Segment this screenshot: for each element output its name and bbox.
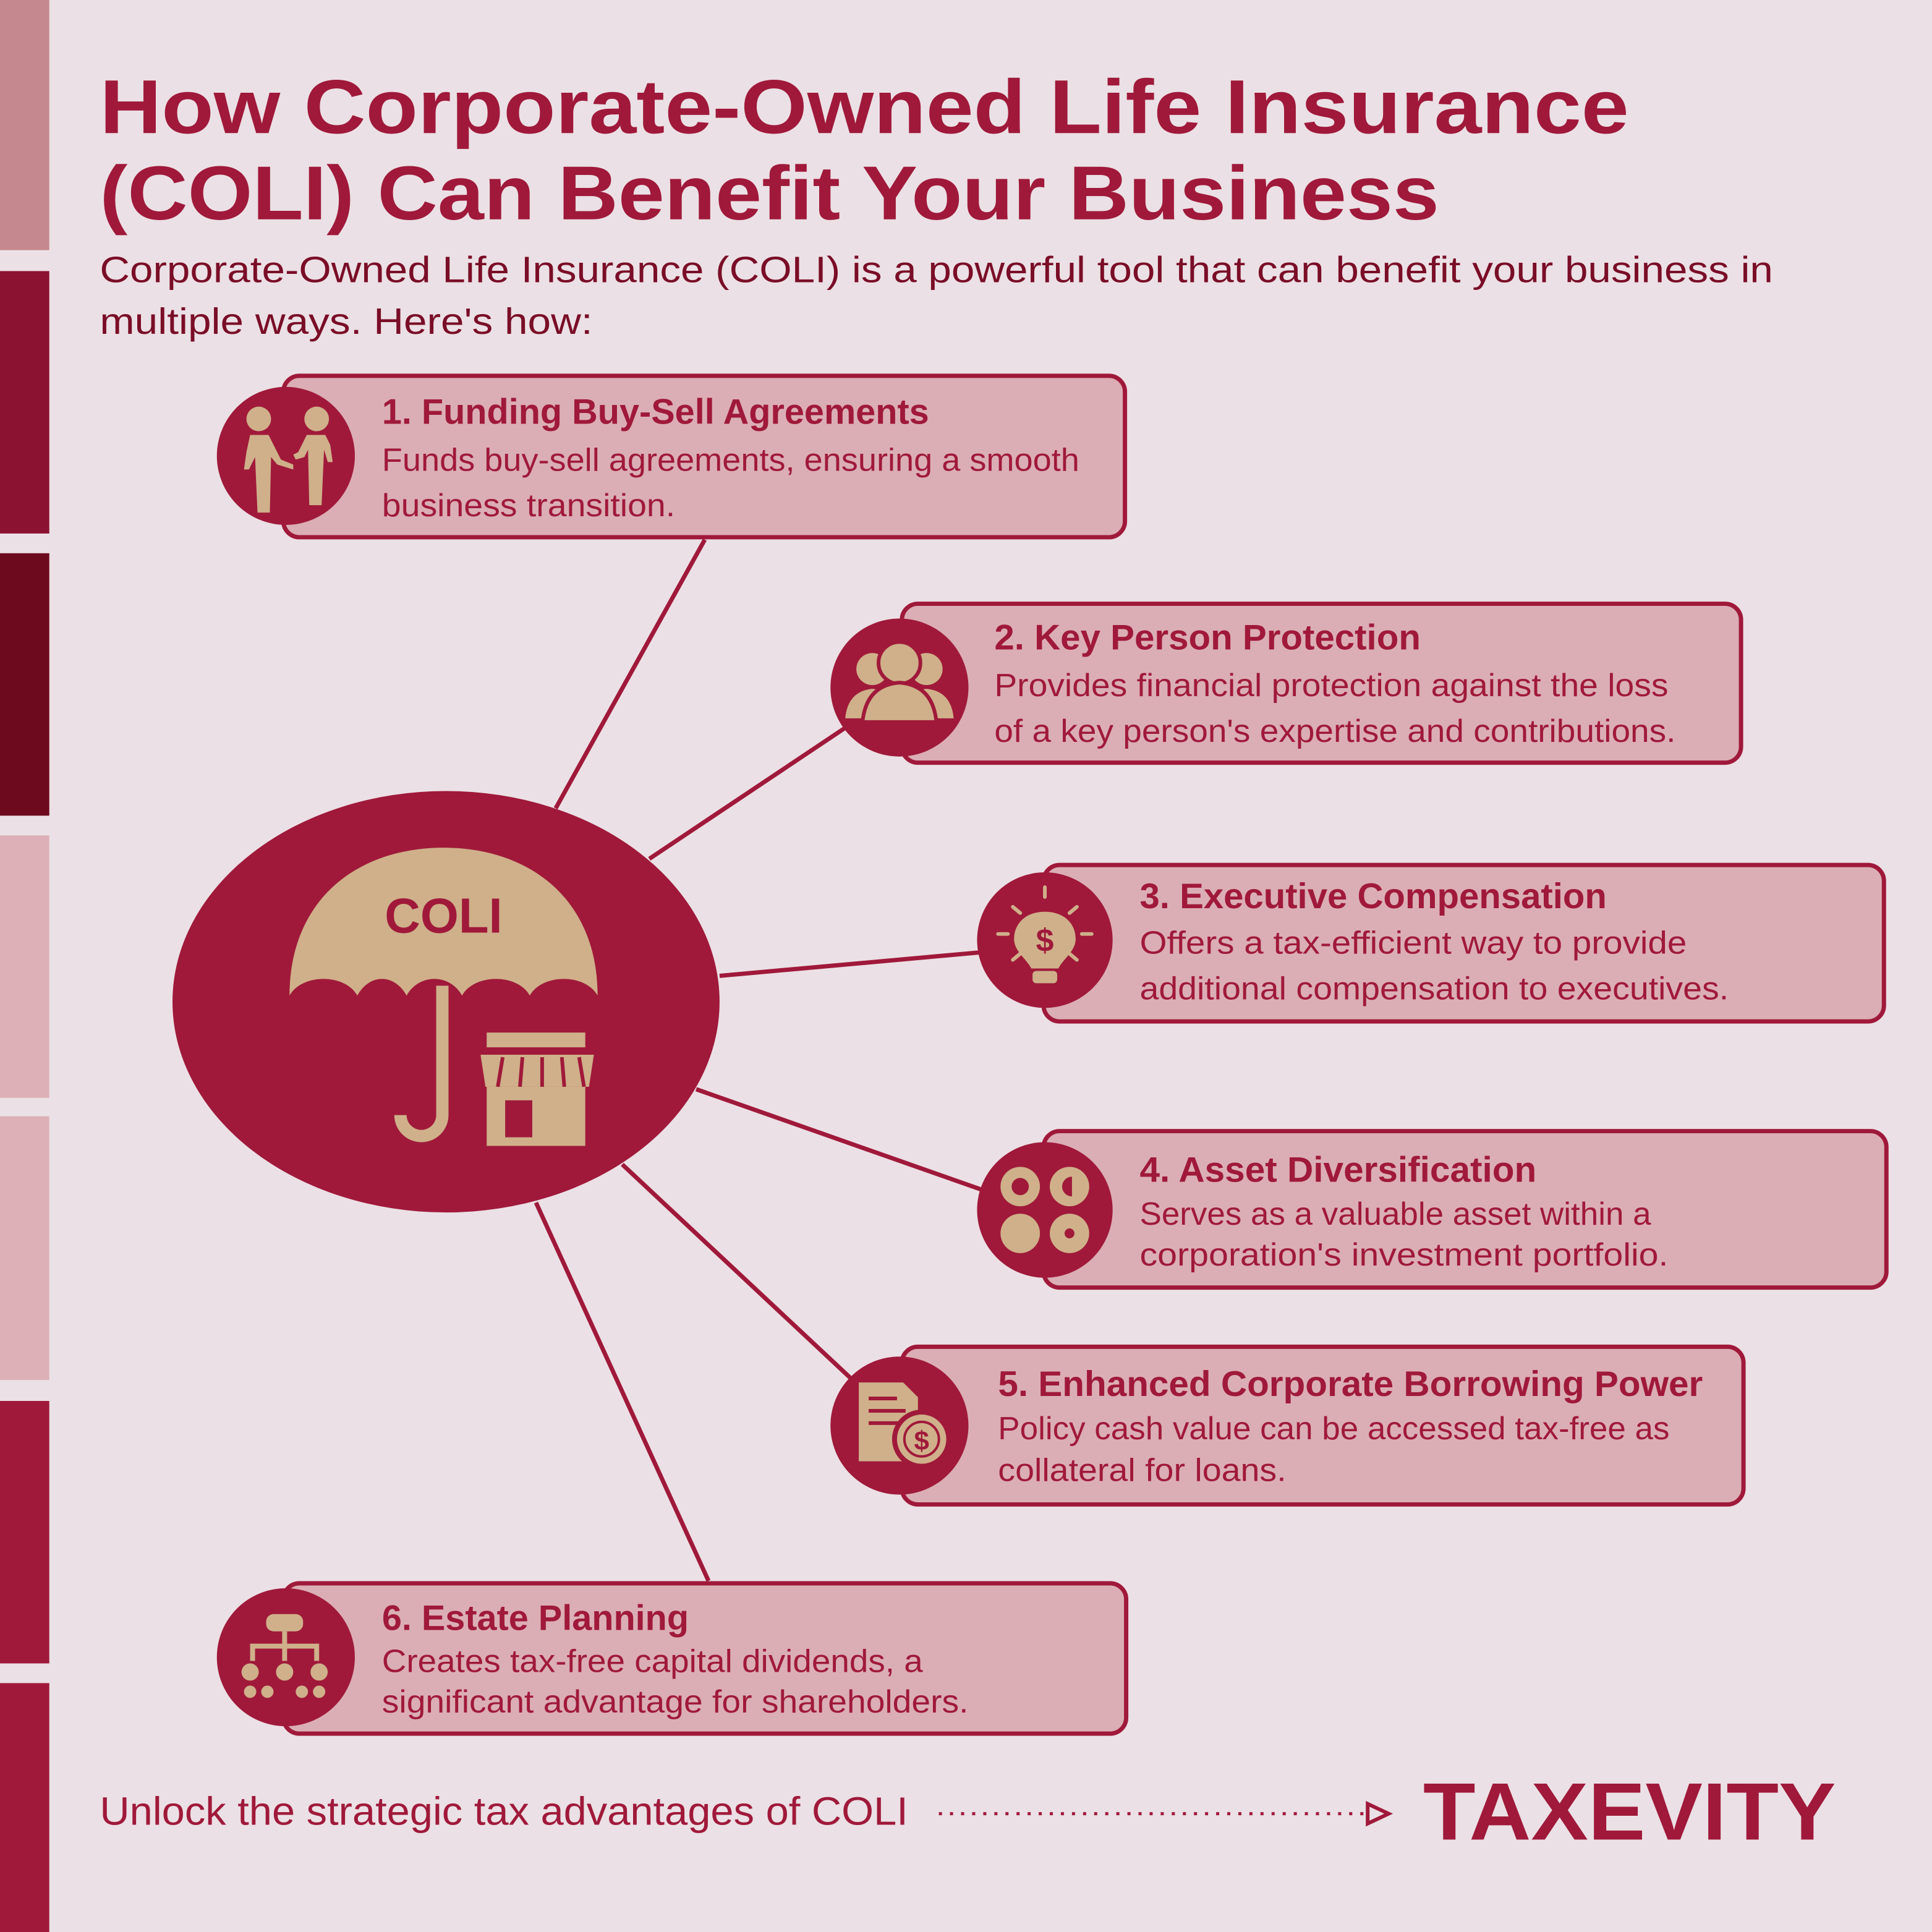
panel 5: borrowing power	[830, 1347, 1743, 1504]
icon: document with coin	[859, 1382, 949, 1466]
panel 2: key person	[830, 604, 1741, 763]
panel 6: estate planning: 6. Estate Planning	[382, 1599, 689, 1638]
title: (COLI) Can Benefit Your Business	[100, 151, 1439, 236]
footer callout: Unlock the strategic tax advantages of COLI	[100, 1789, 908, 1834]
logo: TAXEVITY	[1423, 1766, 1836, 1857]
panel 5: borrowing power: 5. Enhanced Corporate Borrowing Power	[998, 1364, 1703, 1404]
subtitle	[100, 249, 1773, 342]
panel 1: buy-sell	[217, 376, 1125, 537]
connector lines	[536, 540, 983, 1581]
panel 3: executive compensation: 3. Executive Compensation	[1140, 877, 1607, 916]
panel 4: asset diversification: corporation's investment portfolio.	[1140, 1236, 1669, 1272]
icon: document with coin: $	[914, 1426, 929, 1457]
subtitle: multiple ways. Here's how:	[100, 300, 593, 342]
panel 1: buy-sell: business transition.	[382, 487, 675, 523]
icon: lightbulb dollar	[998, 887, 1092, 983]
panel 1: buy-sell: 1. Funding Buy-Sell Agreements	[382, 393, 929, 432]
icon: people group	[845, 642, 954, 722]
panel 4: asset diversification: Serves as a valuable asset within a	[1140, 1196, 1651, 1232]
icon: store	[480, 1032, 594, 1146]
panel 6: estate planning: significant advantage for shareholders.	[382, 1683, 968, 1719]
icon: hierarchy	[242, 1614, 328, 1698]
icon: umbrella	[289, 848, 598, 1142]
icon: umbrella: COLI	[385, 888, 503, 943]
panel 4: asset diversification: 4. Asset Diversification	[1140, 1150, 1536, 1189]
central COLI ellipse	[172, 791, 720, 1212]
icon: four circles	[1000, 1167, 1089, 1253]
panel 5: borrowing power: collateral for loans.	[998, 1452, 1287, 1488]
icon: two people	[244, 407, 333, 513]
panel 4: asset diversification	[977, 1131, 1886, 1288]
subtitle: Corporate-Owned Life Insurance (COLI) is a powerful tool that can benefit your business in	[100, 249, 1773, 290]
icon: lightbulb dollar: $	[1036, 922, 1054, 958]
panel 6: estate planning: Creates tax-free capital dividends, a	[382, 1643, 923, 1679]
panel 3: executive compensation	[977, 865, 1884, 1021]
panel 2: key person: Provides financial protection against the loss	[994, 667, 1669, 703]
arrow: dotted	[939, 1804, 1389, 1824]
panel 3: executive compensation: additional compensation to executives.	[1140, 970, 1729, 1006]
title: How Corporate-Owned Life Insurance	[100, 64, 1629, 150]
panel 6: estate planning	[217, 1583, 1126, 1734]
panel 5: borrowing power: Policy cash value can be accessed tax-free as	[998, 1410, 1669, 1446]
panel 3: executive compensation: Offers a tax-efficient way to provide	[1140, 925, 1687, 961]
panel 2: key person: 2. Key Person Protection	[994, 618, 1421, 657]
title	[100, 64, 1629, 236]
left stripe bar	[0, 0, 49, 1932]
panel 2: key person: of a key person's expertise and contributions.	[994, 713, 1675, 749]
panel 1: buy-sell: Funds buy-sell agreements, ensuring a smooth	[382, 441, 1079, 477]
